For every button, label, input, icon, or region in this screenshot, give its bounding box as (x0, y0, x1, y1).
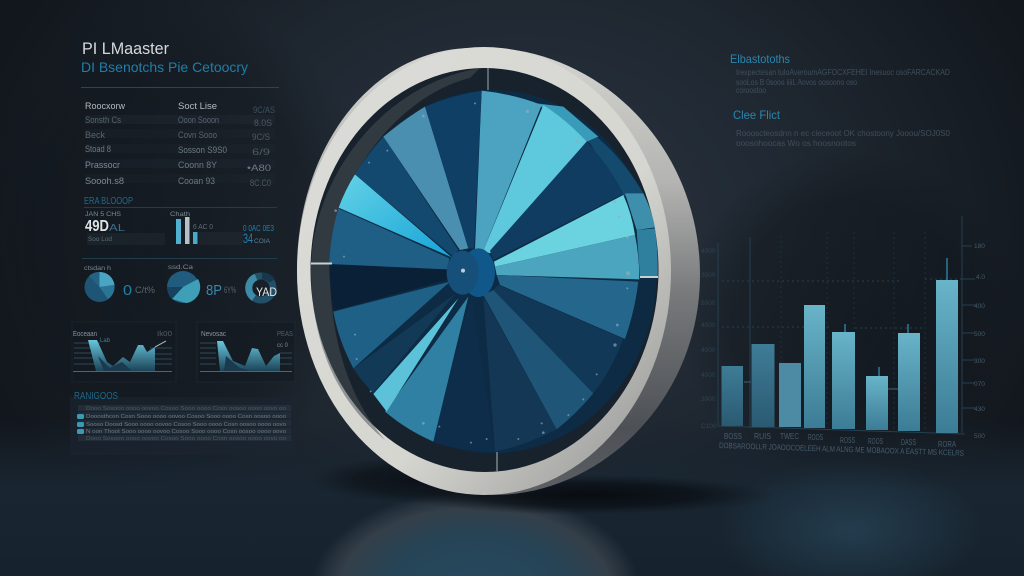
y-axis labels: 430 (974, 406, 985, 413)
slice (493, 285, 623, 393)
slice (483, 105, 587, 253)
mini bar chart (170, 212, 243, 245)
x-axis labels: RORA (938, 440, 957, 449)
KPI number (85, 212, 165, 245)
data table: Prassocr (85, 160, 120, 171)
area chart panel 1: Ik00 (157, 331, 172, 338)
y-axis labels: 3000 (701, 396, 716, 403)
text block: observations: coroostoo (736, 86, 766, 95)
data table: Beck (85, 130, 105, 141)
title: PI LMaaster (82, 39, 169, 58)
heading: observations: Elbastotoths (730, 52, 790, 66)
slice (497, 275, 638, 339)
slice (475, 91, 542, 251)
data table: Covn Sooo (178, 130, 217, 141)
data table: 9C/AS (253, 105, 275, 116)
slice (494, 195, 635, 267)
floor reflection and shadow (310, 456, 985, 576)
KPI stat right: COIA (254, 239, 270, 245)
y-axis labels: 500 (974, 433, 985, 440)
data table: Soct Lise (178, 101, 217, 112)
heading: pie fact: Clee Flict (733, 108, 781, 122)
area chart panel 1 (72, 322, 176, 382)
subtitle: DI Bsenotchs Pie Cetoocry (81, 59, 248, 75)
y-axis labels: 4000 (701, 248, 716, 255)
bar chart (701, 216, 985, 458)
text block: pie fact (736, 129, 951, 148)
panel: right notes (730, 52, 951, 148)
area chart panel 2: cc 0 (277, 343, 289, 349)
y-axis labels: 4.0 (976, 274, 985, 281)
data table: Sosson S9S0 (178, 145, 227, 156)
data table (85, 101, 275, 189)
slice (383, 107, 468, 250)
x-axis labels: RUIS (754, 432, 771, 441)
y-axis labels (701, 243, 985, 440)
slice (339, 174, 452, 257)
y-axis labels: 300 (974, 358, 985, 365)
slice (373, 298, 458, 412)
text block: pie fact: Roooscteosdnn n ec cleceoot OK chostoony Jooou/SOJ0S0 (736, 129, 951, 138)
slice (425, 91, 482, 248)
slice (483, 290, 593, 429)
ring (297, 47, 700, 495)
pie chart 2: 8P (206, 282, 222, 299)
y-axis labels: C100 (701, 423, 717, 430)
wheel slices (329, 90, 658, 453)
reports section: Sooso Doosd Sooo oooo oovoo Cosoo Sooo oooo Cosn oosoo oooo oovo (86, 422, 286, 428)
data table: Ooon Sooon (178, 115, 219, 126)
area chart panel 2: PEAS (277, 331, 293, 338)
x-axis labels: ROSS (840, 436, 855, 445)
x-axis labels: DASS (901, 438, 916, 447)
pie chart 2: ssd.Ca (168, 265, 194, 271)
y-axis labels: 4000 (701, 322, 716, 329)
data table: 6/9 (252, 147, 270, 158)
pie chart 1: 0 (123, 282, 132, 299)
text block: observations: sooLos B 0sooo iiiiL Aovos oosoono oso (736, 78, 857, 87)
slice (329, 264, 447, 311)
pie chart 2 (167, 265, 236, 303)
slice (490, 142, 623, 260)
slice (385, 297, 468, 442)
y-axis labels: 5000 (701, 300, 716, 307)
area chart panel 1: Eoceaan (73, 331, 97, 338)
data table: •A80 (247, 163, 271, 174)
data table: 8.0S (254, 118, 272, 129)
text block: observations (736, 68, 950, 95)
data table: Roocxorw (85, 101, 125, 112)
x-axis labels: BOSS (724, 432, 742, 441)
y-axis labels: 500 (974, 331, 985, 338)
x-axis labels (719, 432, 964, 458)
x-axis labels: TWEC (780, 432, 799, 441)
y-axis labels: 070 (974, 381, 985, 388)
slice (495, 235, 639, 279)
y-axis labels: 180 (974, 243, 985, 250)
reports section: Dooo Sosoon oooo oovoo Cosoo Sooo oooo Cosn oosoo oooo oovo oo (86, 406, 286, 412)
data table: Coonn 8Y (178, 160, 218, 171)
KPI number: Soo Lod (88, 237, 112, 243)
pie chart 1 (84, 266, 155, 302)
text block: observations: Irespectesan tuloAveroumAGFOCXFEHEI Inesuoc osoFARCACKAD (736, 68, 950, 77)
y-axis labels: 3000 (701, 272, 716, 279)
reports section: Dooo Sosoon oooo oovoo Cosoo Sooo oooo Cosn oosoo oooo oovo oo (86, 436, 286, 442)
slice (432, 297, 495, 452)
bars (722, 366, 743, 426)
KPI number: JAN 5 CHS (85, 212, 121, 218)
data table: Stoad 8 (85, 144, 111, 155)
y-axis labels: 4000 (701, 347, 716, 354)
data table: 9C/S (252, 132, 270, 143)
area chart panel 2: Nevosac (201, 331, 226, 338)
KPI number: AL (109, 223, 126, 234)
x-axis labels: DOBSAROOLLR JOAOOCOELEEH ALM ALNG ME MOBAOOX A EASTT MS KCELRS (719, 441, 964, 458)
x-axis labels: ROOS (808, 433, 823, 442)
heading: KPI section: ERA BLOOOP (84, 196, 133, 207)
KPI stat right: 0 0AC 0E3 (243, 224, 274, 233)
y-axis labels: 4000 (701, 372, 716, 379)
data table: Cooan 93 (178, 176, 215, 187)
slice (355, 137, 458, 257)
KPI number: 49D (85, 218, 109, 235)
area chart panel 1: Lab (100, 338, 111, 344)
x-axis labels: ROOS (868, 437, 883, 446)
slice (483, 297, 557, 452)
slice (329, 208, 449, 269)
donut chart (249, 276, 277, 300)
spokes (311, 68, 658, 472)
reports section: Dooosthcon Cosn Sooo oooo oovoo Cosoo Sooo oooo Cosn oosoo oooo (86, 414, 286, 420)
bolts (334, 102, 630, 444)
slice (333, 282, 450, 368)
pie chart 2: 6Y% (224, 285, 236, 295)
panel: left dashboard (70, 39, 296, 455)
area chart panel 2 (197, 322, 295, 382)
reports section: N oon Thoot Sooo oooo oovoo Cosoo Sooo oooo Cosn oosoo oooo oovo (86, 429, 286, 435)
data table: 8C.C0 (250, 178, 271, 189)
mini bar chart: 6 AC 0 (193, 224, 213, 231)
slice (353, 294, 455, 393)
donut chart: YAD (256, 285, 277, 299)
mini bar chart: Chath (170, 212, 190, 218)
data table: Soooh.s8 (85, 176, 124, 187)
pie chart 1: C/t% (135, 285, 155, 295)
y-axis labels: 400 (974, 303, 985, 310)
pie wheel (297, 47, 700, 495)
KPI stat right: 34 (243, 230, 253, 246)
reports section: RANIGOOS (74, 391, 118, 402)
text block: pie fact: ooosohoocas Wo os hoosnootos (736, 139, 856, 148)
reports section (74, 391, 291, 442)
data table: Sonsth Cs (85, 115, 121, 126)
hub (447, 248, 495, 297)
KPI stat right (243, 224, 274, 246)
pie chart 1: ctsdan h (84, 266, 111, 272)
